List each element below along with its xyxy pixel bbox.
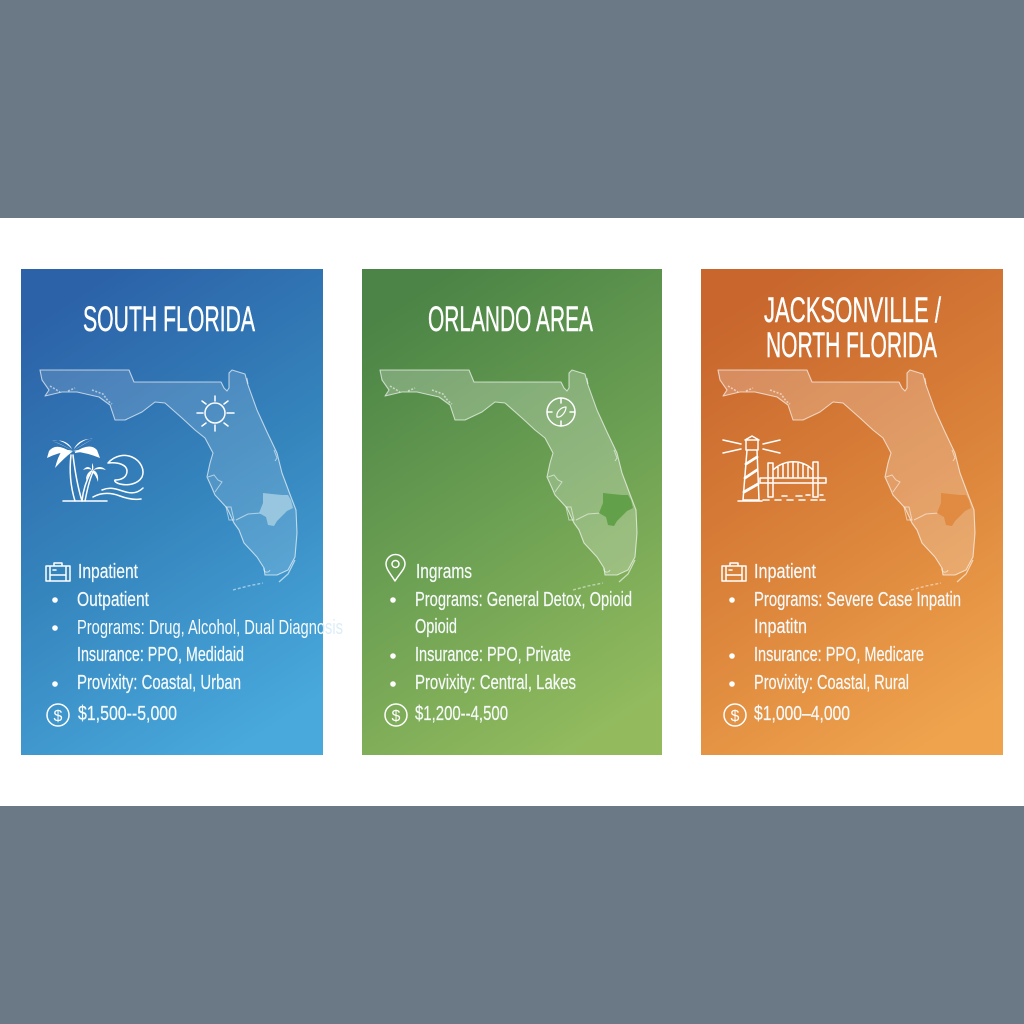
icon: briefcase [46, 563, 70, 581]
list: South Florida details: Programs: Drug, Alcohol, Dual Diagnosis [77, 617, 343, 639]
map tint [718, 370, 975, 575]
icon: briefcase [722, 563, 746, 581]
icon: dollar [47, 704, 69, 726]
list: Jacksonville details [729, 589, 961, 694]
list: South Florida details: Provixity: Coastal, Urban [77, 672, 241, 694]
list: South Florida details: Outpatient [77, 589, 149, 611]
icon: palm trees and wave [47, 439, 143, 501]
list: Orlando details: Provixity: Central, Lakes [415, 672, 576, 694]
text: Inpatient: Inpatient [754, 561, 816, 583]
panel: Orlando Area [362, 269, 662, 755]
map: Florida [380, 370, 637, 590]
map: Florida [718, 370, 975, 590]
heading: South Florida: SOUTH FLORIDA [83, 300, 255, 339]
map: Florida [40, 370, 297, 590]
map highlight [259, 493, 293, 526]
list: Jacksonville details: Insurance: PPO, Medicare [754, 644, 924, 666]
icon: lighthouse and bridge [723, 436, 826, 501]
list: Orlando details: Opioid [415, 616, 457, 638]
list: Orlando details: Programs: General Detox, Opioid [415, 589, 632, 611]
map highlight [599, 493, 633, 526]
icon: compass [547, 398, 575, 426]
text: price: $1,000–4,000 [754, 703, 850, 725]
text: Ingrams: Ingrams [416, 561, 472, 583]
icon: dollar: $ [731, 708, 740, 725]
list: Orlando details: Insurance: PPO, Private [415, 644, 571, 666]
icon: dollar [385, 704, 407, 726]
map tint [380, 370, 637, 575]
map highlight [937, 493, 971, 526]
list: Jacksonville details: Inpatitn [754, 616, 807, 638]
panel: South Florida [21, 269, 343, 755]
text: price: $1,200--4,500 [415, 703, 508, 725]
heading: Jacksonville / North Florida [764, 291, 941, 365]
white band [0, 218, 1024, 806]
icon: dollar [724, 704, 746, 726]
icon: dollar: $ [392, 708, 401, 725]
icon: dollar: $ [54, 708, 63, 725]
list: South Florida details: Insurance: PPO, Medidaid [77, 644, 244, 666]
text: price: $1,500--5,000 [78, 703, 177, 725]
panel: Jacksonville / North Florida [701, 269, 1003, 755]
list: Orlando details [390, 589, 632, 694]
icon: sun [197, 396, 234, 431]
heading: Orlando Area: ORLANDO AREA [428, 300, 593, 339]
text: Inpatient: Inpatient [78, 561, 138, 583]
list: South Florida details [52, 589, 343, 694]
icon: location pin [386, 554, 405, 581]
list: Jacksonville details: Provixity: Coastal, Rural [754, 672, 909, 694]
